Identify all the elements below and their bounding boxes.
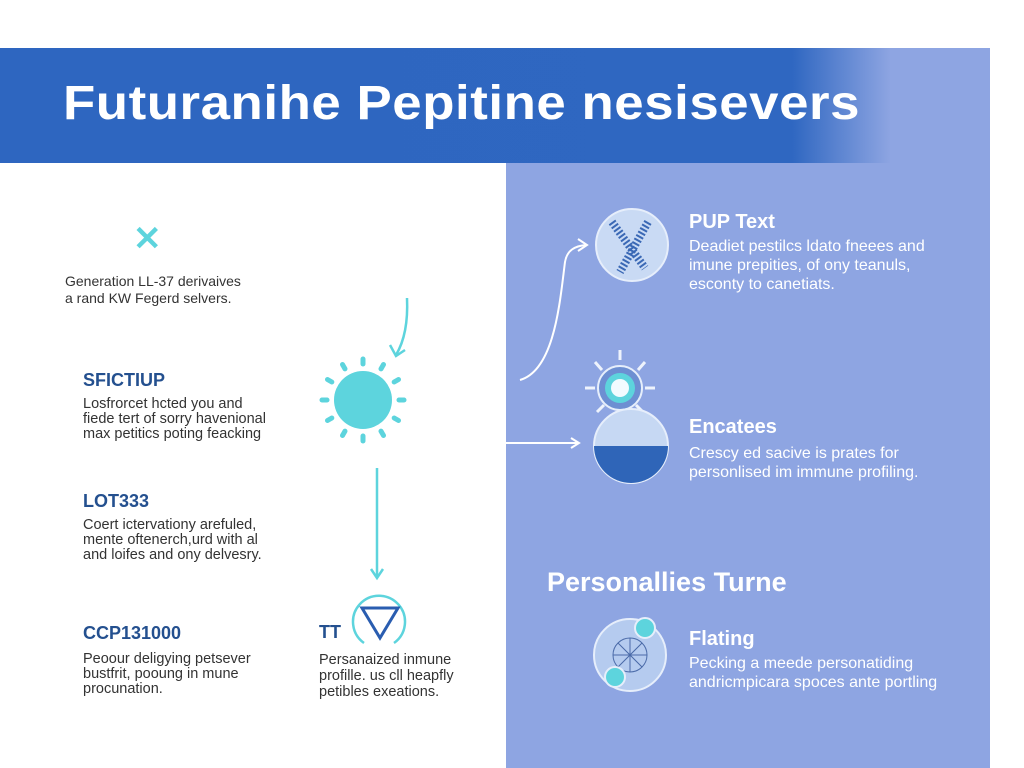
arrow: into sun	[390, 298, 407, 356]
block: LOT333	[83, 491, 262, 563]
icon: sun	[322, 359, 404, 441]
icon: network sphere	[593, 617, 667, 692]
block: SFICTIUP: max petitics poting feacking	[83, 426, 261, 442]
block: CCP131000	[83, 623, 251, 697]
block: Flating	[689, 628, 937, 691]
block: Flating: Pecking a meede personatiding	[689, 655, 913, 672]
block: LOT333: mente oftenerch,urd with al	[83, 532, 258, 548]
block: PUP Text: Deadiet pestilcs ldato fneees and	[689, 238, 925, 255]
arrow: straight	[506, 438, 579, 448]
icon: peptide sphere	[596, 209, 668, 281]
block: SFICTIUP: Losfrorcet hcted you and	[83, 396, 243, 412]
text: generation	[65, 273, 241, 306]
icon: triangle circle	[352, 594, 406, 644]
block: CCP131000: bustfrit, pooung in mune	[83, 666, 239, 682]
block: Encatees: personlised im immune profiling.	[689, 464, 918, 481]
block: PUP Text: PUP Text	[689, 211, 775, 233]
title: Futuranihe Pepitine nesisevers	[63, 77, 860, 130]
block: PUP Text: imune prepities, of ony teanuls,	[689, 257, 910, 274]
block: LOT333: LOT333	[83, 491, 149, 511]
block: SFICTIUP	[83, 370, 266, 442]
header bar	[0, 48, 990, 163]
block: TT: TT	[319, 622, 341, 642]
icon: half-filled sphere	[594, 409, 668, 483]
block: SFICTIUP: fiede tert of sorry havenional	[83, 411, 266, 427]
icon: cross: ✕	[133, 220, 162, 258]
heading: Personallies Turne: Personallies Turne	[547, 567, 787, 597]
block: LOT333: Coert ictervationy arefuled,	[83, 517, 256, 533]
block: TT: petibles exeations.	[319, 684, 439, 700]
diagram: right arrows and icons	[506, 208, 669, 484]
block: CCP131000: CCP131000	[83, 623, 181, 643]
text: generation: Generation LL-37 derivaives	[65, 273, 241, 289]
right panel	[506, 48, 990, 768]
block: SFICTIUP: SFICTIUP	[83, 370, 165, 390]
block: TT	[319, 622, 454, 700]
text: generation: a rand KW Fegerd selvers.	[65, 290, 232, 306]
block: Encatees: Encatees	[689, 416, 777, 438]
block: LOT333: and loifes and ony delvesry.	[83, 547, 262, 563]
block: TT: profille. us cll heapfly	[319, 668, 454, 684]
block: Flating: andricmpicara spoces ante portling	[689, 674, 937, 691]
block: CCP131000: Peoour deligying petsever	[83, 651, 251, 667]
arrow: curved up	[520, 239, 587, 380]
block: Encatees: Crescy ed sacive is prates for	[689, 445, 899, 462]
block: PUP Text	[689, 211, 925, 293]
block: PUP Text: esconty to canetiats.	[689, 276, 835, 293]
block: CCP131000: procunation.	[83, 681, 163, 697]
arrow: down	[371, 468, 383, 578]
block: TT: Persanaized inmune	[319, 652, 451, 668]
block: Flating: Flating	[689, 628, 755, 650]
icon: sun ring	[585, 350, 655, 412]
block: Encatees	[689, 416, 918, 481]
diagram: left flow	[320, 298, 408, 580]
